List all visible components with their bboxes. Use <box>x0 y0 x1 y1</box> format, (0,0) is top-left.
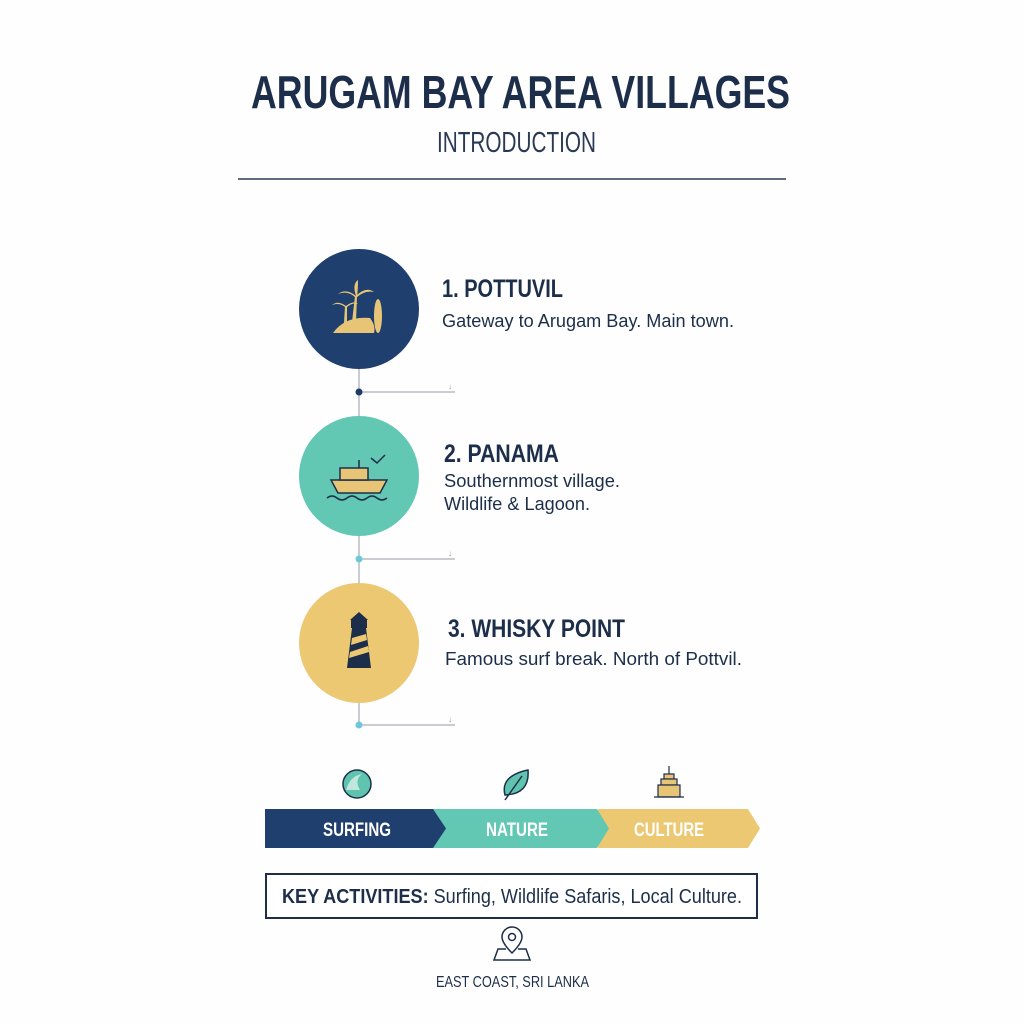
icon: wave <box>343 770 371 798</box>
chevron: culture: CULTURE <box>634 820 704 841</box>
timeline connector: ↓ <box>448 382 452 391</box>
timeline connector <box>356 369 455 728</box>
key activities box <box>266 874 757 918</box>
chevron: nature: NATURE <box>486 820 548 841</box>
icon: temple <box>654 766 684 797</box>
icon: leaf <box>504 770 528 800</box>
chevron: culture <box>598 809 760 848</box>
chevron bar <box>265 809 760 848</box>
text: panama: Wildlife & Lagoon. <box>444 494 590 514</box>
chevron: surfing: SURFING <box>323 820 391 841</box>
title: ARUGAM BAY AREA VILLAGES <box>251 66 790 118</box>
chevron: nature <box>432 809 609 848</box>
chevron: surfing <box>265 809 446 848</box>
footer location: EAST COAST, SRI LANKA <box>436 974 589 991</box>
icon: map pin <box>494 927 530 960</box>
text: panama: 2. PANAMA <box>444 440 559 468</box>
text: panama: Southernmost village. <box>444 471 620 491</box>
icon: palm island <box>332 280 382 333</box>
timeline connector: ↓ <box>448 549 452 558</box>
text: whisky point: 3. WHISKY POINT <box>448 615 625 643</box>
timeline connector: ↓ <box>448 715 452 724</box>
text: pottuvil: Gateway to Arugam Bay. Main town. <box>442 311 734 331</box>
icon: boat <box>327 455 387 500</box>
key activities box: KEY ACTIVITIES: Surfing, Wildlife Safaris, Local Culture. <box>282 886 742 908</box>
circle: whisky point <box>299 583 419 703</box>
icon: lighthouse <box>347 612 371 668</box>
text: whisky point <box>445 615 742 669</box>
text: pottuvil: 1. POTTUVIL <box>442 275 563 303</box>
text: pottuvil <box>442 275 734 331</box>
text: panama <box>444 440 620 514</box>
subtitle: INTRODUCTION <box>437 127 596 159</box>
circle: panama <box>299 416 419 536</box>
circle: pottuvil <box>299 249 419 369</box>
text: whisky point: Famous surf break. North of Pottvil. <box>445 649 742 669</box>
